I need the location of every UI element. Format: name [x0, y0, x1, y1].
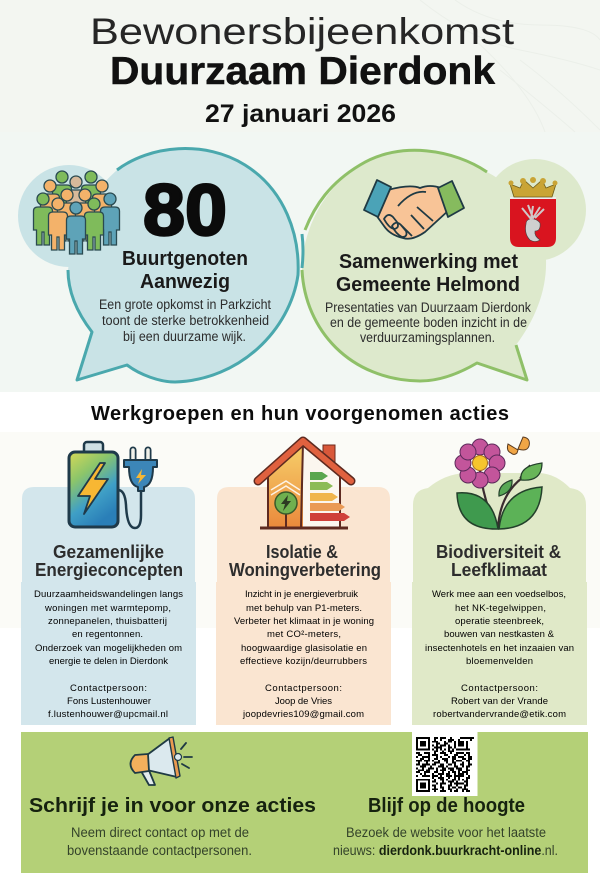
panel: samenwerking gemeente	[302, 150, 586, 381]
body text: energie te delen in Dierdonk	[49, 656, 168, 667]
icon: house with energy labels	[258, 441, 351, 528]
body text	[234, 589, 374, 720]
card background	[216, 487, 391, 725]
text: contact	[67, 825, 252, 858]
panel: call to action band	[21, 732, 588, 873]
body text: insectenhotels en het inzaaien van	[425, 643, 574, 654]
description: verduurzamingsplannen.	[360, 330, 495, 345]
panel: 80 buurtgenoten	[18, 149, 298, 382]
body text: met CO²-meters,	[267, 629, 341, 640]
body text: met behulp van P1-meters.	[246, 603, 362, 614]
heading: buurtgenoten aanwezig: Buurtgenoten	[122, 248, 248, 270]
body text: bouwen van nestkasten &	[444, 629, 555, 640]
body text: Contactpersoon:	[265, 683, 342, 694]
panel: biodiversiteit en leefklimaat	[412, 437, 587, 725]
body text: operatie steenbreek,	[455, 616, 544, 627]
panel: isolatie en woningverbetering	[216, 441, 391, 725]
heading: samenwerking met gemeente helmond: Gemeente Helmond	[336, 274, 520, 296]
body text: Inzicht in je energieverbruik	[245, 589, 358, 600]
heading: Biodiversiteit &	[436, 542, 561, 562]
icon: coat of arms Helmond	[508, 177, 558, 247]
text: website: Bezoek de website voor het laatste	[346, 825, 546, 840]
title line 1: Bewonersbijeenkomst	[90, 11, 515, 52]
body text: hoogwaardige glasisolatie en	[241, 643, 367, 654]
body text: Onderzoek van mogelijkheden om	[35, 643, 182, 654]
heading: Energieconcepten	[35, 560, 183, 580]
text: contact: Neem direct contact op met de	[71, 825, 249, 840]
text: contact: bovenstaande contactpersonen.	[67, 843, 252, 858]
qr code	[412, 732, 478, 796]
speech bubble right	[302, 150, 586, 381]
body text: Duurzaamheidswandelingen langs	[34, 589, 183, 600]
section heading: Werkgroepen en hun voorgenomen acties	[91, 403, 509, 425]
body text: zonnepanelen, thuisbatterij	[48, 616, 167, 627]
heading: buurtgenoten aanwezig: Aanwezig	[140, 271, 230, 293]
body text: Fons Lustenhouwer	[67, 696, 151, 707]
body text: woningen met warmtepomp,	[44, 603, 171, 614]
body text: joopdevries109@gmail.com	[242, 709, 364, 720]
body text	[34, 589, 183, 720]
icon: handshake	[364, 180, 464, 239]
heading: blijf op de hoogte: Blijf op de hoogte	[368, 794, 525, 817]
description	[325, 300, 531, 345]
heading	[436, 542, 561, 580]
title line 2: Duurzaam Dierdonk	[110, 50, 495, 93]
date: 27 januari 2026	[205, 100, 396, 128]
text: website: nieuws: dierdonk.buurkracht-online.nl.	[333, 843, 558, 858]
icon: battery and plug	[69, 442, 157, 528]
body text: effectieve kozijn/deurrubbers	[240, 656, 367, 667]
description	[99, 297, 271, 344]
heading: samenwerking met gemeente helmond	[336, 251, 520, 296]
body text: Werk mee aan een voedselbos,	[432, 589, 566, 600]
body text: Contactpersoon:	[461, 683, 538, 694]
body text: en regentonnen.	[72, 629, 143, 640]
body text: Verbeter het klimaat in je woning	[234, 616, 374, 627]
text: website	[333, 825, 558, 858]
body text: f.lustenhouwer@upcmail.nl	[48, 709, 168, 720]
heading	[35, 542, 183, 580]
heading: samenwerking met gemeente helmond: Samenwerking met	[339, 251, 518, 273]
body text: bloemenvelden	[466, 656, 533, 667]
icon: flower and butterfly	[455, 437, 542, 529]
description: en de gemeente boden inzicht in de	[330, 315, 527, 330]
description: Presentaties van Duurzaam Dierdonk	[325, 300, 531, 315]
band background	[21, 732, 588, 873]
body text: Joop de Vries	[275, 696, 332, 707]
speech bubble left	[18, 149, 298, 382]
card background	[21, 487, 196, 725]
icon: megaphone	[130, 737, 192, 785]
description: Een grote opkomst in Parkzicht	[99, 297, 271, 312]
heading: schrijf je in: Schrijf je in voor onze acties	[29, 794, 316, 817]
card background	[412, 473, 587, 725]
body text: het NK-tegelwippen,	[455, 603, 546, 614]
number 80: 80	[143, 171, 227, 251]
heading: Woningverbetering	[229, 560, 381, 580]
body text: Robert van der Vrande	[451, 696, 548, 707]
heading: Isolatie &	[266, 542, 338, 562]
body text	[425, 589, 574, 720]
body text: Contactpersoon:	[70, 683, 147, 694]
heading	[229, 542, 381, 580]
description: bij een duurzame wijk.	[123, 329, 246, 344]
icon: crowd of people	[34, 171, 120, 254]
description: toont de sterke betrokkenheid	[102, 313, 269, 328]
panel: gezamenlijke energieconcepten	[21, 442, 196, 725]
heading: Leefklimaat	[451, 560, 547, 580]
heading: buurtgenoten aanwezig	[122, 248, 248, 293]
body text: robertvandervrande@etik.com	[433, 709, 566, 720]
heading: Gezamenlijke	[53, 542, 164, 562]
